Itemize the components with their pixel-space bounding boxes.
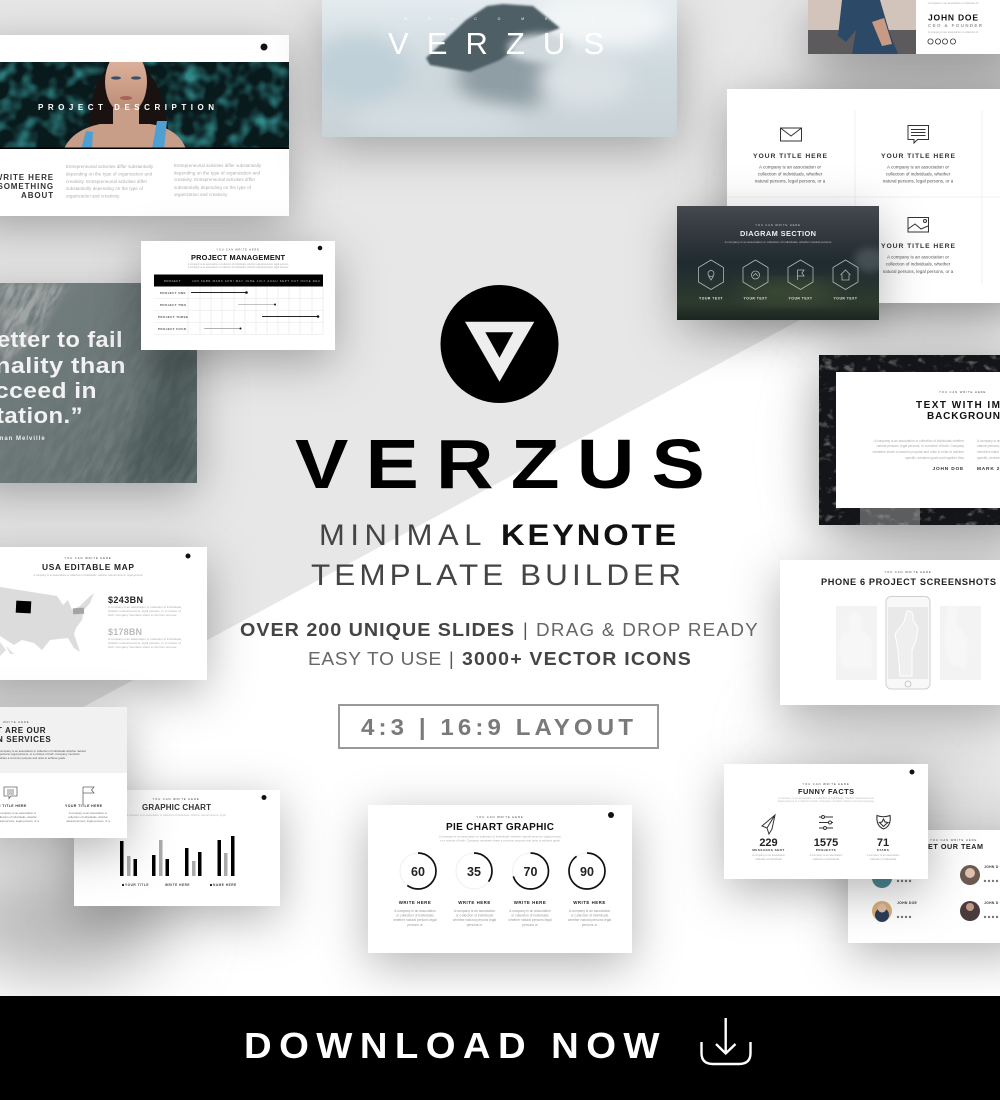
body: specific, declared goals and together they [905,456,964,460]
card: funny facts: legal persons or a mixture of both. Company members share a common purpose [778,799,875,803]
card: services [0,707,127,838]
card: funny facts [724,764,928,879]
layout badge [339,705,658,748]
hexagon labels [699,296,858,300]
gauge titles [399,900,606,905]
services body: company is an association or collection of individuals whether natural [0,749,86,753]
feature line 1 [240,620,759,640]
photo: woman among leaves [0,62,289,149]
body text: creativity. Entrepreneurial activities differ [66,179,148,184]
icon: flag [83,787,94,804]
gantt heading: YOU CAN WRITE HERE [216,248,260,252]
card: funny facts: A company is an association [752,853,785,857]
body text: depending on the type of organization and [66,172,153,176]
fog heading: VERZUS [388,26,604,61]
card: text with image background: BACKGROUN [927,411,1000,422]
icon: star shield [877,816,890,829]
card: funny facts: A company is an association [810,853,843,857]
feature line 1: | [523,620,528,640]
signatures: JOHN DOE [933,466,964,472]
body text: organization and creativity. [174,192,228,197]
names: JOHN D [984,901,999,905]
card: pie chart graphic: whether natural persons legal [508,918,552,922]
map figures: $243BN [108,595,143,605]
card: usa editable map: A company is an association or collection of individuals, [108,605,182,609]
feature line 2: EASY TO USE [308,649,442,669]
card: pie chart graphic: A company is an association [394,909,436,913]
dot [260,44,268,50]
subtitle line 1 [319,519,679,552]
body text [66,163,262,198]
card: phone screenshots [780,560,1000,705]
icon: envelope [780,128,802,141]
item body: A company is an association or [887,254,950,260]
card: graphic chart: A company is an association or collection of individuals, whether natural persons, legal [126,813,226,817]
icon: sliders [819,816,833,830]
hexagon labels: YOUR TEXT [744,296,768,300]
download label: DOWNLOAD NOW [244,1025,667,1066]
card: usa editable map: whether natural persons, legal persons, or a mixture of [108,641,181,645]
title: VERZUS [295,425,722,503]
gauge titles: WRITE HERE [514,900,546,905]
body text: Entrepreneurial activities differ substantially [174,163,262,168]
social icons [928,39,956,44]
subtitle line 1: MINIMAL [319,519,487,552]
photo: man in denim [808,0,916,54]
card: usa editable map: USA EDITABLE MAP [42,562,134,572]
card: funny facts: collection of individuals [755,857,782,861]
card: phone screenshots: PHONE 6 PROJECT SCREENSHOTS [821,577,996,587]
card: graphic chart [74,790,280,906]
card: meet our team [848,830,1000,943]
services body [0,749,86,760]
body: A company is an association or collection of individuals whether [874,439,965,443]
body text: creativity. Entrepreneurial activities differ [174,177,256,182]
pie heading: YOU CAN WRITE HERE [476,815,524,819]
item titles: YOUR TITLE HERE [881,243,955,250]
card: usa editable map: both. Company members share a common purpose [108,645,177,649]
hexagon labels: YOUR TEXT [699,296,723,300]
chart legend: NAME HERE [213,883,237,887]
layout badge: 4:3 | 16:9 LAYOUT [361,714,637,740]
gauge numbers: 35 [467,865,481,879]
card: project management: PROJECT MANAGEMENT [191,253,285,262]
card: your title icons [727,89,1000,303]
card: quote [0,268,224,521]
card: text with image background [819,355,1000,525]
card: meet our team: ET OUR TEAM [928,842,983,851]
social dots [897,880,998,918]
feature line 1: OVER 200 UNIQUE SLIDES [240,620,515,640]
item body: natural persons, legal persons, or a [755,178,826,184]
card: john doe: A company is an association or collection of [928,30,978,34]
logo: black circle with triangle [440,285,558,403]
card: project management: JAN FEBR MARC APRI MAY JUNE JULY AUGU SEPT OCT NOVE DEC [192,279,320,283]
gauge numbers: 90 [580,865,594,879]
body text: substantially depending on the type of [66,186,144,191]
quote text [0,327,126,428]
bar chart [120,836,234,876]
card: services: natural persons, legal persons, or a [66,819,110,823]
card: diagram section [677,206,886,320]
card: usa editable map [0,547,207,680]
card: project management: A company is an association or collection of individuals, whether natural persons, legal persons [188,263,289,266]
body text: substantially depending on the type of [174,185,252,190]
card: pie chart graphic: whether natural persons legal [568,918,611,922]
fact numbers: 1575 [814,837,838,849]
hexagon labels: YOUR TEXT [789,296,813,300]
card: pie chart graphic: A company is an association or collection of individuals, whether natural persons, legal persons [439,834,561,838]
name block: A company is an association or collection of [928,1,978,5]
gantt rows: PROJECT FOUR [158,327,187,331]
card: pie chart graphic: whether natural persons legal [393,918,437,922]
feature line 2: 3000+ VECTOR ICONS [462,649,692,669]
fact numbers [759,837,889,849]
hexagon labels: YOUR TEXT [834,296,858,300]
gantt rows [158,291,188,331]
card: funny facts: A company is an association [867,853,900,857]
card: pie chart graphic: PIE CHART GRAPHIC [446,822,554,833]
gantt rows: PROJECT ONE [160,291,186,295]
card: project management: PROJECT [164,279,181,283]
card: usa editable map: A company is an association or collection of individuals, whether natural persons, legal persons [33,573,143,577]
card: funny facts: FUNNY FACTS [798,787,854,796]
card: pie chart graphic: or collection of individuals [511,914,549,918]
body text: Entrepreneurial activities differ substantially [66,164,154,169]
icon: paper plane [762,815,775,834]
chart legend: WRITE HERE [165,883,190,887]
card: fog title image [310,0,677,138]
item body: collection of individuals, whether [886,262,951,266]
gauge numbers: 60 [411,865,425,879]
chart heading: YOU CAN WRITE HERE [152,797,200,801]
chart legend [122,883,237,887]
phone heading: YOU CAN WRITE HERE [884,570,932,574]
card: pie chart graphic: persons or [407,923,424,927]
card: text with image background: TEXT WITH IM [916,400,1000,411]
card: usa editable map: $178BN [108,627,142,637]
body: members share a common purpose and unite in order to achieve [873,450,964,454]
card: pie chart graphic: A company is an association [454,909,495,913]
fact numbers: 71 [877,837,889,849]
item titles [753,153,955,250]
card: project description: ABOUT [21,191,54,200]
gantt grid [154,286,323,334]
card: funny facts: A company is an association or collection of individuals, whether natural persons [778,796,874,800]
hexagon icons [698,260,858,290]
card: pie chart graphic: A company is an association [569,909,610,913]
chart legend: YOUR TITLE [125,883,149,887]
names: JOHN D [984,865,999,869]
portraits [872,865,980,922]
card: text with image background: MARK 2 [977,466,1000,472]
gauge titles: WRITE HERE [573,900,606,905]
card: pie chart graphic [368,805,632,953]
item body [755,164,954,274]
photo heading: PROJECT DESCRIPTION [38,103,214,112]
feature line 2 [308,649,692,669]
card: pie chart graphic: or collection of individuals [396,914,434,918]
card: services: A company is an association or [69,811,107,815]
card: usa editable map: whether natural persons, legal persons, or a mixture of [108,609,181,613]
map of usa [0,587,94,656]
fact labels [752,848,889,852]
mountain peak [426,4,560,72]
subtitle line 2: TEMPLATE BUILDER [311,559,685,592]
gantt rows: PROJECT TWO [160,303,187,307]
fact numbers: 229 [759,837,778,849]
card: funny facts: collection of individuals [813,857,840,861]
team heading: YOU CAN WRITE HERE [930,838,977,842]
item body: collection of individuals, whether [886,172,951,176]
card: project management: A company is an association or collection of individuals, whether natural persons, legal persons [188,266,289,269]
card: pie chart graphic: A company is an association [509,909,551,913]
item body: A company is an association or [759,164,822,170]
card: pie chart graphic: persons or [467,923,483,927]
card: pie chart graphic: or collection of individuals [456,914,494,918]
body [873,439,965,460]
card: pie chart graphic: whether natural persons legal [453,918,496,922]
item body: A company is an association or [887,164,950,170]
diagram heading: YOU CAN WRITE HERE [755,223,801,227]
card: usa editable map: A company is an association or collection of individuals, [108,637,182,641]
gantt header [154,274,323,286]
feature line 1: DRAG & DROP READY [536,620,759,640]
card: funny facts: collection of individuals [870,857,897,861]
card: project management [141,241,335,350]
card: pie chart graphic: or collection of individuals [571,914,609,918]
card: pie chart graphic: persons or [522,923,539,927]
icon: download arrow [702,1018,750,1064]
gauge numbers: 70 [524,865,537,879]
fact labels: MESSAGES SENT [752,848,785,852]
item titles: YOUR TITLE HERE [753,153,827,160]
card: pie chart graphic: or a mixture of both. Company members share a common purpose and unite to achieve goals [440,838,560,842]
fog subtitle: W E L C O M E T O [404,17,594,21]
item body: natural persons, legal persons, or a [883,178,954,184]
right screenshot [940,606,981,680]
body: natural persons, legal persons, or a mixture of both. Company [877,444,964,448]
services heading: WRITE HERE [3,720,30,724]
heading: YOU CAN WRITE HERE [939,390,986,394]
card: john doe: JOHN DOE [928,12,978,22]
services titles: YOUR TITLE HERE [65,804,103,808]
body text: depending on the type of organization and [174,170,261,176]
feature line 2: | [449,649,454,669]
body text: organization and creativity. [66,194,120,198]
icon: chat small [4,787,17,798]
ring gauges [400,853,605,889]
quote text: etter to fail [0,327,123,352]
gauge titles: WRITE HERE [458,900,491,905]
icon: chat [908,126,928,143]
fact labels: STARS [877,848,889,852]
card: john doe [808,0,1000,54]
gauge numbers [411,865,594,879]
services body: persons, legal persons, or a mixture of both. Company members [0,752,80,756]
gantt rows: PROJECT THREE [158,315,188,319]
names [897,865,999,905]
map heading: YOU CAN WRITE HERE [64,556,112,560]
names: JOHN DOE [897,901,918,905]
icon: picture [908,218,928,232]
services titles [0,804,103,808]
subtitle line 1: KEYNOTE [501,519,679,552]
card: pie chart graphic: persons or [582,923,598,927]
card: project description [0,35,289,216]
item titles: YOUR TITLE HERE [881,153,955,160]
card: diagram section: A company is an association or collection of individuals, whether natural persons [725,240,832,244]
gauge titles: WRITE HERE [399,900,431,905]
left screenshot [836,606,877,680]
card: diagram section: DIAGRAM SECTION [740,229,816,238]
card: graphic chart: GRAPHIC CHART [142,803,211,812]
phone [886,596,930,689]
facts heading: YOU CAN WRITE HERE [802,782,850,786]
gantt bars [191,291,319,330]
services body: share a common purpose and unite to achieve goals [0,756,66,760]
card: john doe: CEO & FOUNDER [928,23,983,28]
item body: collection of individuals, whether [758,172,823,176]
card: usa editable map: both. Company members share a common purpose [108,613,177,617]
download bar [0,996,1000,1100]
item body: natural persons, legal persons, or a [883,269,954,274]
card: services: collection of individuals, whether [68,815,108,819]
fact labels: PROJECTS [816,848,836,852]
